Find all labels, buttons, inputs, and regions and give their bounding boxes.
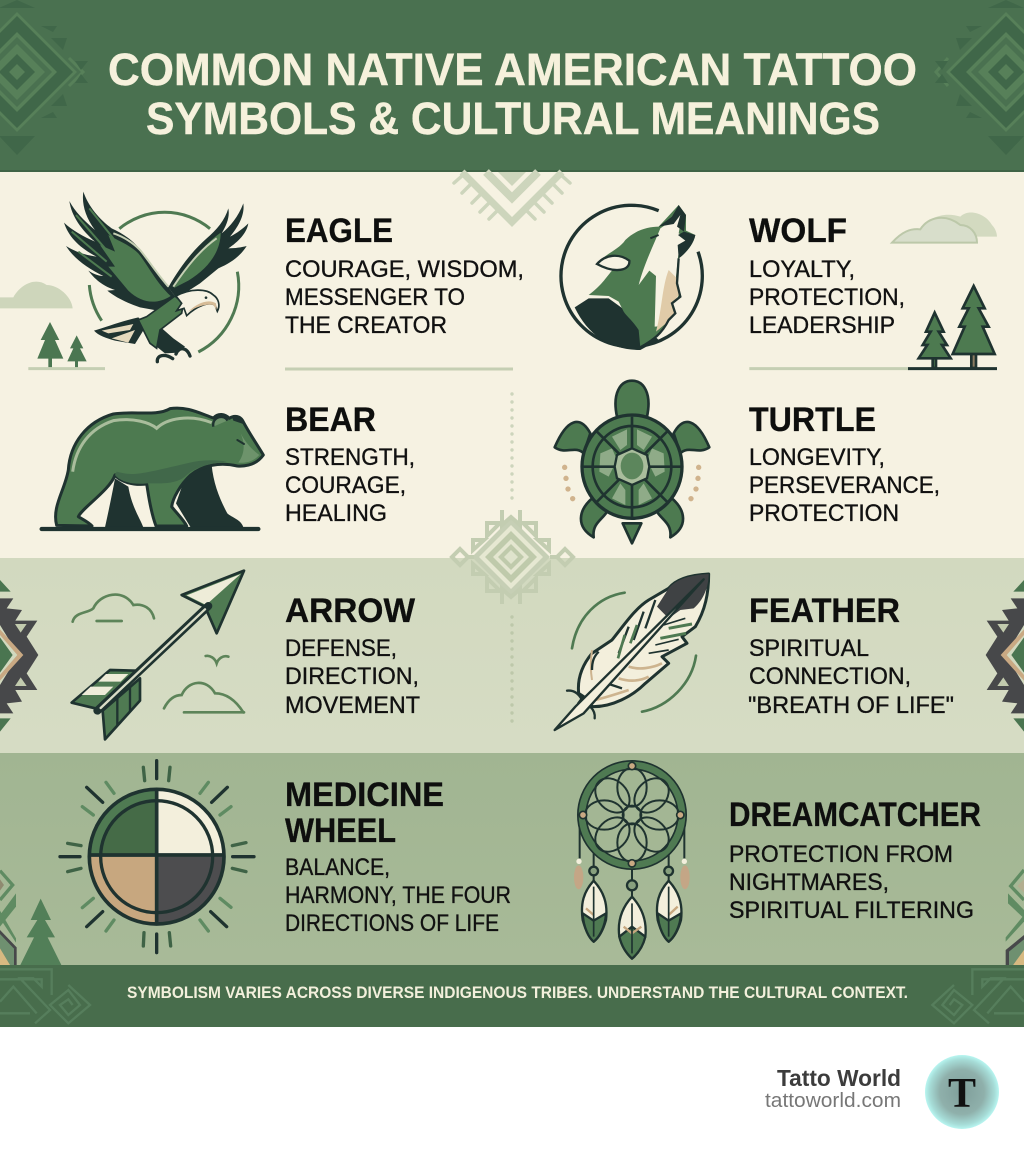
title	[108, 44, 917, 144]
brand name: Tatto World	[777, 1065, 901, 1091]
footer note: SYMBOLISM VARIES ACROSS DIVERSE INDIGENOUS TRIBES. UNDERSTAND THE CULTURAL CONTEXT.	[127, 984, 908, 1002]
text: wolf meaning: LEADERSHIP	[749, 312, 895, 339]
text: turtle meaning: PERSEVERANCE,	[749, 472, 940, 499]
text: arrow meaning: DEFENSE,	[285, 635, 397, 662]
divider: left	[285, 368, 513, 370]
text: eagle meaning: MESSENGER TO	[285, 284, 465, 311]
panel: cream section	[0, 172, 1024, 558]
brand url: tattoworld.com	[765, 1090, 901, 1112]
ornament: right zigzag	[986, 580, 1024, 732]
ornament: lower left pattern	[0, 871, 17, 965]
panel: medium sage section	[0, 753, 1024, 965]
heading: turtle: TURTLE	[749, 401, 876, 439]
text: turtle meaning	[749, 444, 940, 527]
ornament: top center chevrons	[454, 172, 570, 222]
ornament: middle center diamond	[452, 510, 573, 604]
icon: eagle	[64, 192, 248, 362]
text: dreamcatcher meaning: PROTECTION FROM	[729, 841, 953, 868]
heading: eagle: EAGLE	[285, 212, 393, 250]
heading: medicine wheel	[285, 776, 444, 850]
text: wolf meaning	[749, 256, 905, 339]
text: bear meaning	[285, 444, 415, 527]
heading: wolf: WOLF	[749, 212, 847, 250]
panel: header band	[0, 0, 1024, 172]
text: arrow meaning: DIRECTION,	[285, 663, 419, 690]
ornament: header right diamond	[935, 0, 1024, 155]
heading: medicine wheel: WHEEL	[285, 812, 396, 850]
ornament: header left diamond	[0, 0, 88, 155]
text: medicine wheel meaning: HARMONY, THE FOUR	[285, 882, 511, 909]
text: medicine wheel meaning	[285, 854, 511, 937]
text: medicine wheel meaning: DIRECTIONS OF LIFE	[285, 910, 499, 937]
text: dreamcatcher meaning: SPIRITUAL FILTERING	[729, 897, 974, 924]
ornament: eagle scenery	[0, 282, 105, 369]
ornament: wolf cloud	[892, 213, 997, 243]
text: turtle meaning: PROTECTION	[749, 500, 899, 527]
text: feather meaning: "BREATH OF LIFE"	[748, 692, 954, 719]
heading: arrow: ARROW	[285, 592, 416, 630]
panel: light sage section	[0, 558, 1024, 753]
text: eagle meaning: COURAGE, WISDOM,	[285, 256, 524, 283]
text: arrow meaning	[285, 635, 420, 719]
text: bear meaning: COURAGE,	[285, 472, 406, 499]
text: wolf meaning: PROTECTION,	[749, 284, 905, 311]
icon: brand logo	[925, 1055, 999, 1129]
text: eagle meaning	[285, 256, 524, 339]
text: feather meaning: CONNECTION,	[749, 663, 911, 690]
text: bear meaning: HEALING	[285, 500, 387, 527]
text: dreamcatcher meaning	[729, 841, 974, 924]
text: medicine wheel meaning: BALANCE,	[285, 854, 390, 881]
text: turtle meaning: LONGEVITY,	[749, 444, 885, 471]
text: bear meaning: STRENGTH,	[285, 444, 415, 471]
panel: footer band	[0, 965, 1024, 1027]
ornament: lower right pattern	[1006, 870, 1024, 966]
heading: bear: BEAR	[285, 401, 376, 439]
text: arrow meaning: MOVEMENT	[285, 692, 420, 719]
ornament: footer left pattern	[0, 969, 90, 1023]
title: SYMBOLS & CULTURAL MEANINGS	[146, 93, 880, 144]
heading: feather: FEATHER	[749, 592, 900, 630]
heading: medicine wheel: MEDICINE	[285, 776, 444, 814]
ornament: left zigzag	[0, 580, 38, 732]
text: eagle meaning: THE CREATOR	[285, 312, 447, 339]
icon: brand logo: T	[948, 1071, 976, 1117]
text: dreamcatcher meaning: NIGHTMARES,	[729, 869, 889, 896]
icon: dreamcatcher	[574, 762, 690, 959]
icon: bear	[42, 408, 263, 529]
icon: arrow	[72, 571, 244, 739]
icon: lower left tree	[20, 899, 62, 966]
icon: wolf	[561, 205, 702, 350]
ornament: footer right pattern	[932, 969, 1024, 1023]
heading: dreamcatcher: DREAMCATCHER	[729, 796, 981, 834]
icon: feather	[555, 574, 709, 730]
text: wolf meaning: LOYALTY,	[749, 256, 855, 283]
icon: medicine wheel	[60, 761, 254, 953]
ornament: wolf trees	[749, 286, 997, 369]
ornament: dotted dividers	[510, 394, 514, 727]
text: feather meaning	[748, 635, 954, 719]
text: feather meaning: SPIRITUAL	[749, 635, 869, 662]
title: COMMON NATIVE AMERICAN TATTOO	[108, 44, 917, 95]
icon: turtle	[555, 381, 709, 543]
